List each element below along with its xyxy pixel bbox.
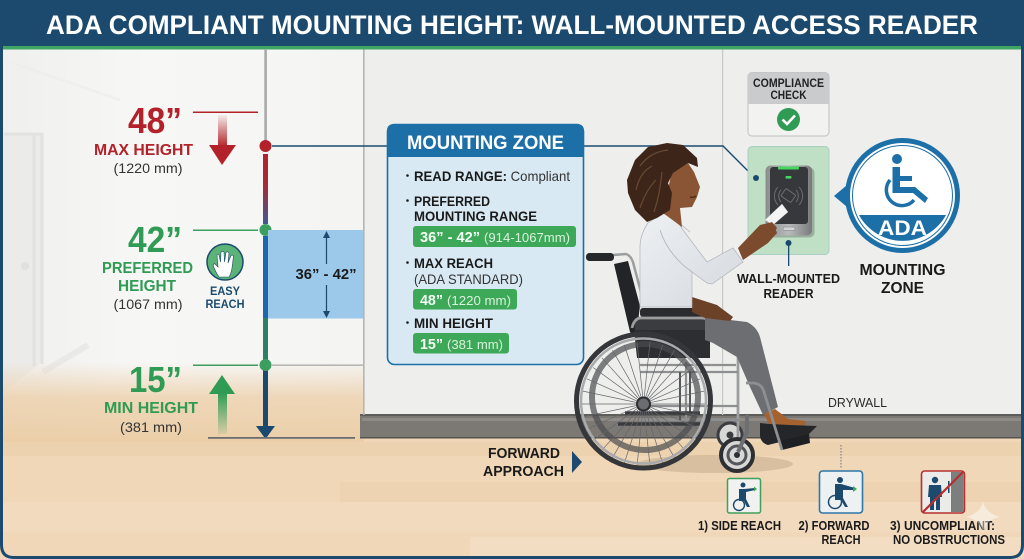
- title: ADA COMPLIANT MOUNTING HEIGHT: WALL-MOUNTED ACCESS READER: [46, 10, 978, 40]
- min height item: (381 mm): [447, 337, 503, 352]
- preferred range band: [268, 230, 363, 318]
- front caster: [721, 415, 753, 471]
- watermark sparkle: [966, 501, 1000, 533]
- compliance check box: COMPLIANCE: [753, 78, 824, 90]
- marker: 48 inch max height: (1220 mm): [114, 160, 182, 176]
- marker: 42 inch preferred height: HEIGHT: [118, 278, 176, 295]
- marker: 48 inch max height: [94, 100, 258, 176]
- icon: uncompliant obstruction: [890, 471, 1005, 547]
- icon: ADA mounting zone badge: ADA: [878, 217, 927, 240]
- marker: 42 inch preferred height: PREFERRED: [102, 260, 193, 277]
- min height item: 15”: [420, 336, 443, 353]
- preferred mounting range item: 36” - 42”: [420, 229, 480, 246]
- compliance check box: CHECK: [770, 90, 807, 102]
- marker: 15 inch min height: [104, 359, 258, 435]
- rear caster: [718, 423, 742, 447]
- max reach item: [406, 256, 523, 310]
- wheelchair user illustration: [576, 143, 817, 473]
- wall-mounted reader: READER: [764, 287, 814, 301]
- forward approach label: APPROACH: [483, 464, 564, 480]
- preferred mounting range item: PREFERRED: [414, 194, 490, 209]
- marker: 42 inch preferred height: 42”: [128, 219, 182, 260]
- wall-mounted reader: [737, 146, 840, 301]
- leader line to reader: [272, 146, 755, 178]
- reader label: WALL-MOUNTED: [737, 272, 840, 286]
- preferred mounting range item: [406, 194, 576, 247]
- icon label: 1) SIDE REACH: [698, 519, 781, 533]
- icon: ADA mounting zone badge: [834, 138, 960, 297]
- fingers over card: [760, 222, 777, 236]
- icon: easy reach hand: REACH: [206, 297, 244, 311]
- icon: forward reach: REACH: [822, 533, 860, 547]
- marker: 42 inch preferred height: [102, 219, 258, 312]
- marker: 48 inch max height: MAX HEIGHT: [94, 142, 193, 159]
- max reach item: (ADA STANDARD): [414, 272, 523, 287]
- marker: 48 inch max height: 48”: [128, 100, 182, 141]
- header bar: [0, 0, 1024, 50]
- drywall label: DRYWALL: [828, 395, 887, 410]
- compliance check box: [748, 72, 829, 136]
- max reach item: (1220 mm): [447, 293, 511, 308]
- head and hair: [627, 143, 700, 227]
- icon: uncompliant obstruction: NO OBSTRUCTIONS: [893, 533, 1005, 547]
- panel: mounting zone: [387, 124, 584, 364]
- read range item: READ RANGE: Compliant: [414, 168, 570, 184]
- marker: 42 inch preferred height: (1067 mm): [114, 296, 182, 312]
- wheelchair seat: [618, 308, 740, 440]
- wheelchair back and handle: [586, 253, 642, 338]
- marker: 15 inch min height: 15”: [129, 359, 182, 400]
- footwear and footplate: [746, 383, 817, 450]
- legs: [705, 317, 778, 415]
- torso and shirt: [640, 213, 743, 321]
- icon: easy reach hand: EASY: [210, 284, 240, 298]
- access card: [765, 204, 788, 225]
- forward approach label: [483, 446, 582, 480]
- icon label: 2) FORWARD: [798, 519, 870, 533]
- icon: check mark: [777, 108, 800, 131]
- preferred range band: 36” - 42”: [296, 267, 356, 283]
- forward approach label: FORWARD: [488, 446, 560, 462]
- icon: ADA mounting zone badge: ZONE: [881, 280, 924, 297]
- marker: 15 inch min height: MIN HEIGHT: [104, 400, 198, 417]
- max reach item: MAX REACH: [414, 256, 493, 271]
- min height item: [406, 316, 509, 354]
- icon: forward reach: [798, 445, 870, 547]
- arm skin reaching the reader: [738, 222, 777, 260]
- badge label: MOUNTING: [860, 262, 946, 279]
- preferred mounting range item: MOUNTING RANGE: [414, 209, 537, 224]
- max reach item: 48”: [420, 292, 443, 309]
- icon: side reach: [698, 478, 781, 533]
- floor shadow: [637, 455, 793, 473]
- height scale: [208, 49, 363, 439]
- icon: easy reach hand: [206, 244, 244, 311]
- min height item: MIN HEIGHT: [414, 316, 494, 331]
- panel heading: MOUNTING ZONE: [407, 133, 564, 154]
- rear wheel: [576, 334, 710, 468]
- marker: 15 inch min height: (381 mm): [120, 419, 182, 435]
- icon label: 3) UNCOMPLIANT:: [890, 519, 995, 533]
- preferred mounting range item: (914-1067mm): [484, 230, 570, 245]
